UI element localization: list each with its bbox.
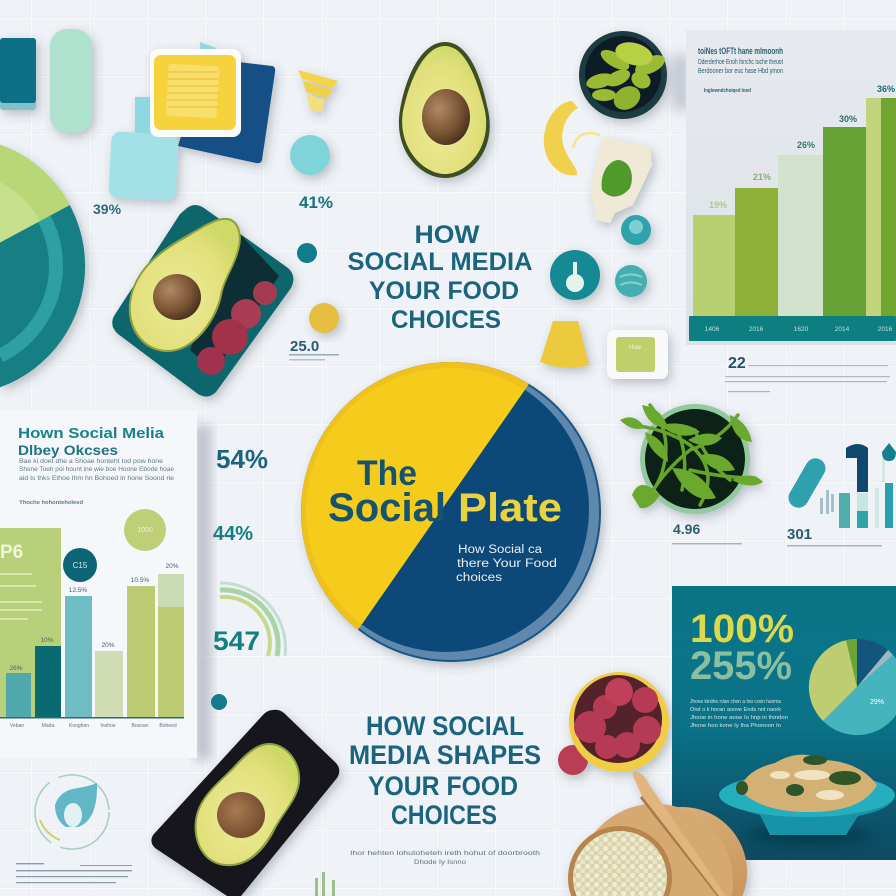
gauge with 547 — [213, 583, 285, 656]
card chart: Boheed — [159, 723, 177, 729]
salad bowl — [620, 404, 763, 514]
panel copy: Ond o k horan aoove Ends nnt naork — [690, 707, 781, 713]
bar value labels: 36% — [877, 84, 895, 94]
chart axis strip — [689, 316, 896, 341]
card chart: Bosoan — [132, 723, 149, 729]
big figures — [690, 607, 794, 688]
stat 39%: 39% — [93, 201, 122, 217]
stat 25.0 — [289, 338, 339, 360]
title bottom: CHOICES — [391, 800, 497, 830]
card body text: Bae ki doet dhe a Shoae honteht Iod pow hone — [19, 459, 164, 465]
bowl of green vegetables — [579, 31, 668, 119]
chart heading: toiNes tOFTt hane mlmoonh — [698, 46, 783, 56]
yellow ball — [309, 303, 339, 333]
small footer text: Dhode Iy Isnno — [414, 860, 467, 866]
card chart: P6 — [0, 542, 23, 563]
stat 41%: 41% — [299, 193, 333, 212]
teal block top left — [0, 38, 36, 110]
bar value labels: 19% — [709, 200, 727, 210]
card body text: aid Is thks Ethoe Ihm hn Bohoed in hone Soond rie — [19, 476, 175, 482]
right bar chart panel: 1620 — [794, 326, 809, 333]
stat 301: 301 — [787, 526, 812, 543]
card body text — [19, 459, 175, 506]
stat 54%: 54% — [216, 444, 268, 474]
teal cup — [290, 135, 330, 175]
small round icon — [211, 694, 227, 710]
teal tray with avocado and berries — [112, 205, 293, 397]
title top: HOW — [414, 221, 480, 249]
panel copy: Jhooe in hone aooe Io hnp in thindon — [690, 715, 788, 721]
plate heading — [328, 454, 562, 530]
bar value labels: 30% — [839, 114, 857, 124]
raspberry bowl — [558, 672, 669, 775]
card heading: Hown Social Melia — [18, 425, 165, 442]
stat 44%: 44% — [213, 523, 253, 545]
pale green pill — [50, 29, 92, 133]
small teal dot — [297, 243, 317, 263]
small chart with pill icon — [785, 443, 896, 528]
panel pie chart — [809, 639, 896, 735]
teal dish with food — [719, 755, 895, 844]
big figures: 255% — [690, 644, 792, 688]
card chart: 12.5% — [69, 587, 87, 594]
bar value labels: 26% — [797, 140, 815, 150]
plate heading: Social — [328, 486, 446, 530]
circular sketch bottom left — [35, 775, 109, 849]
big pie at left edge — [0, 145, 85, 387]
right bar chart panel: 2016 — [878, 326, 893, 333]
yellow cone — [540, 321, 589, 368]
avocado top centre — [399, 42, 490, 178]
card chart: 26% — [9, 665, 23, 672]
stat 4.96: 4.96 — [673, 521, 700, 537]
central plate — [295, 355, 601, 662]
small note bottom left — [16, 863, 132, 883]
chart heading: Inglowndchoiqed Iond — [704, 88, 751, 94]
dark teal badge — [63, 548, 97, 582]
card heading — [18, 425, 165, 458]
wooden board, spoon and grain bowl — [568, 772, 747, 896]
card chart: 1000 — [137, 527, 153, 534]
white card with green label: How — [629, 345, 642, 351]
panel pie chart: 29% — [870, 699, 884, 706]
bar value labels: 21% — [753, 172, 771, 182]
plate subtext: How Social ca — [458, 544, 543, 556]
tiny bars bottom — [315, 872, 335, 896]
white card with green label — [607, 330, 668, 379]
plate heading: The — [357, 454, 417, 493]
plate heading: Plate — [458, 486, 562, 530]
title bottom — [349, 711, 541, 830]
butter dish with blocks — [108, 42, 275, 201]
chart heading — [698, 46, 784, 94]
title top: SOCIAL MEDIA — [348, 248, 532, 276]
teal round icons — [550, 215, 651, 300]
title top: CHOICES — [391, 306, 501, 334]
card chart: C15 — [73, 561, 88, 570]
panel copy — [690, 699, 788, 729]
card chart: 20% — [165, 563, 179, 570]
gauge with 547: 547 — [213, 626, 260, 656]
title top: YOUR FOOD — [369, 277, 519, 305]
plate subtext — [456, 544, 557, 584]
phone with avocado — [151, 710, 339, 896]
teal panel bottom right — [672, 586, 896, 860]
card chart: Inohoe — [100, 723, 116, 729]
note below chart: 22 — [728, 355, 746, 372]
stat 4.96 — [672, 521, 742, 544]
card body text: Shone Toeh poi hount ine wie boe Hoone Ebode hoae — [19, 467, 175, 473]
stat 301 — [787, 526, 882, 546]
left infographic card — [0, 410, 210, 760]
title top — [348, 221, 532, 334]
yellow banana slice — [544, 101, 578, 175]
small footer text: Ihor hehten lohutoheteh ireth hohut of doorbrooth — [350, 851, 540, 857]
stat 25.0: 25.0 — [290, 338, 319, 355]
cheese with leaf — [590, 137, 652, 223]
card heading: Dlbey Okcses — [18, 442, 118, 458]
right bar chart panel: 2016 — [749, 326, 764, 333]
big figures: 100% — [690, 607, 794, 651]
card chart: Mada — [42, 723, 54, 729]
card chart — [0, 509, 184, 729]
yellow stacked wedges — [298, 70, 338, 112]
plate subtext: there Your Food — [457, 558, 557, 570]
olive badge — [124, 509, 166, 551]
lemon peel curl — [573, 133, 600, 148]
bars — [693, 215, 736, 316]
right bar chart panel: 1406 — [705, 326, 720, 333]
chart heading: Berdooner bor euc hase Hbd ymon — [698, 66, 783, 75]
panel copy: Jhone hoo kone Iy Iha Phonoon In — [690, 723, 781, 729]
chart heading: Dderderhoe Enoh fonchc tuche theuot — [698, 57, 784, 66]
small footer text — [350, 851, 540, 866]
card chart: 10.5% — [131, 577, 149, 584]
card chart: 20% — [101, 642, 115, 649]
right bar chart panel — [672, 30, 896, 345]
title bottom: HOW SOCIAL — [366, 711, 524, 741]
title bottom: MEDIA SHAPES — [349, 740, 541, 770]
bar value labels — [709, 84, 895, 210]
plate subtext: choices — [456, 572, 502, 584]
panel copy: Jhooe kiniihe rdan chon a Ino coon hanma — [690, 699, 782, 705]
card body text: Yhoche hohonteholeed — [19, 500, 83, 506]
right bar chart panel: 2014 — [835, 326, 850, 333]
card chart: Kooghen — [69, 723, 89, 729]
card chart: Veban — [10, 723, 24, 729]
card chart: 10% — [40, 637, 54, 644]
title bottom: YOUR FOOD — [368, 771, 518, 801]
